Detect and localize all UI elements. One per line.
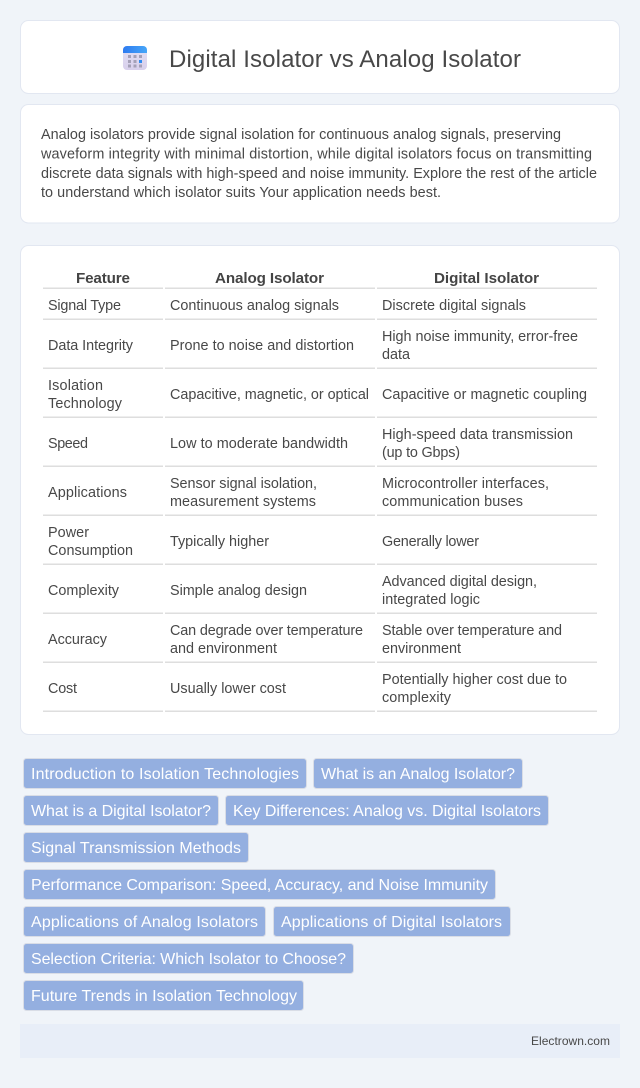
- tag: digital applications: Applications of Digital Isolators: [281, 914, 502, 931]
- table row: complexity: Simple analog design: [170, 583, 307, 599]
- table row: speed: [43, 427, 597, 467]
- text block: introduction paragraph: waveform integrity with minimal distortion, while digital isolators focus on transmitting: [40, 146, 592, 162]
- table row: accuracy: environment: [382, 641, 461, 657]
- tag: performance comparison: [24, 870, 496, 900]
- table row: applications: communication buses: [382, 494, 523, 510]
- table header row: Analog Isolator: [215, 270, 324, 287]
- table row: complexity: Advanced digital design,: [382, 574, 537, 590]
- tag: analog isolator: [314, 758, 522, 788]
- table row: speed: High-speed data transmission: [382, 427, 573, 443]
- table row: data integrity: Data Integrity: [48, 338, 134, 354]
- table row: accuracy: [43, 623, 597, 663]
- table row: accuracy: Stable over temperature and: [382, 623, 562, 639]
- text block: introduction paragraph: Analog isolators provide signal isolation for continuous analog signals, preserving: [41, 127, 561, 143]
- table row: accuracy: and environment: [170, 641, 277, 657]
- table row: complexity: [43, 574, 597, 614]
- table row: applications: Microcontroller interfaces,: [382, 476, 549, 492]
- footer: [20, 1024, 620, 1058]
- table row: speed: Low to moderate bandwidth: [170, 436, 348, 452]
- table row: data integrity: Prone to noise and distortion: [170, 338, 354, 354]
- table row: complexity: integrated logic: [382, 592, 480, 608]
- table header row: Feature: [76, 270, 130, 287]
- tag: key differences: [226, 796, 548, 826]
- table row: power consumption: Typically higher: [170, 534, 269, 550]
- table row: isolation technology: Capacitive, magnetic, or optical: [170, 387, 369, 403]
- table row: accuracy: Can degrade over temperature: [170, 623, 363, 639]
- text block: introduction paragraph: discrete data signals with high-speed and noise immunity. Explore the rest of the article: [41, 166, 597, 182]
- topic tags: [24, 758, 548, 1010]
- table row: signal type: [43, 298, 597, 320]
- table header row: [43, 270, 597, 289]
- table row: cost: Cost: [48, 681, 77, 697]
- table row: power consumption: Power: [48, 525, 89, 541]
- tag: future trends: Future Trends in Isolation Technology: [31, 988, 297, 1005]
- tag: introduction: [24, 758, 306, 788]
- text block: introduction paragraph: to understand which isolator suits Your application needs best.: [41, 185, 441, 201]
- table row: applications: measurement systems: [170, 494, 316, 510]
- table row: signal type: Discrete digital signals: [382, 298, 526, 314]
- tag: digital isolator: [24, 796, 218, 826]
- tag: analog applications: [24, 906, 266, 936]
- table row: cost: [43, 672, 597, 712]
- tag: performance comparison: Performance Comparison: Speed, Accuracy, and Noise Immunity: [31, 877, 488, 894]
- panel: introduction: [20, 104, 620, 223]
- panel: comparison table: [20, 246, 620, 734]
- tag: signal transmission: [24, 832, 248, 862]
- table row: power consumption: Generally lower: [382, 534, 479, 550]
- tag: digital isolator: What is a Digital Isolator?: [31, 803, 211, 820]
- table row: complexity: Complexity: [48, 583, 120, 599]
- table row: cost: complexity: [382, 690, 452, 706]
- table header row: Digital Isolator: [434, 270, 539, 287]
- tag: digital applications: [274, 906, 510, 936]
- text block: introduction paragraph: [40, 127, 597, 201]
- tag: key differences: Key Differences: Analog vs. Digital Isolators: [233, 803, 541, 820]
- tag: analog applications: Applications of Analog Isolators: [31, 914, 258, 931]
- table row: isolation technology: [43, 378, 597, 418]
- title: Digital Isolator vs Analog Isolator: [169, 46, 521, 73]
- footer credit: Electrown.com: [531, 1034, 610, 1048]
- table row: power consumption: [43, 525, 597, 565]
- tag: analog isolator: What is an Analog Isolator?: [321, 766, 515, 783]
- table row: speed: Speed: [48, 436, 88, 452]
- table row: applications: [43, 476, 597, 516]
- tag: future trends: [24, 980, 304, 1010]
- table row: data integrity: data: [382, 347, 410, 363]
- table row: isolation technology: Technology: [48, 396, 123, 412]
- panel: title card: [20, 20, 620, 94]
- tag: signal transmission: Signal Transmission Methods: [31, 840, 241, 857]
- table row: isolation technology: Capacitive or magnetic coupling: [382, 387, 587, 403]
- table row: cost: Potentially higher cost due to: [382, 672, 567, 688]
- table row: speed: (up to Gbps): [382, 445, 460, 461]
- table row: applications: Sensor signal isolation,: [170, 476, 317, 492]
- table row: data integrity: [43, 329, 597, 369]
- icon: calendar: [123, 46, 147, 70]
- table row: power consumption: Consumption: [48, 543, 133, 559]
- table row: accuracy: Accuracy: [48, 632, 108, 648]
- table row: data integrity: High noise immunity, error-free: [382, 329, 578, 345]
- tag: selection criteria: [24, 944, 354, 974]
- table row: signal type: Continuous analog signals: [170, 298, 339, 314]
- table row: cost: Usually lower cost: [170, 681, 286, 697]
- table row: signal type: Signal Type: [48, 298, 121, 314]
- table row: isolation technology: Isolation: [48, 378, 103, 394]
- tag: introduction: Introduction to Isolation Technologies: [31, 766, 299, 783]
- table row: applications: Applications: [48, 485, 127, 501]
- tag: selection criteria: Selection Criteria: Which Isolator to Choose?: [31, 951, 346, 968]
